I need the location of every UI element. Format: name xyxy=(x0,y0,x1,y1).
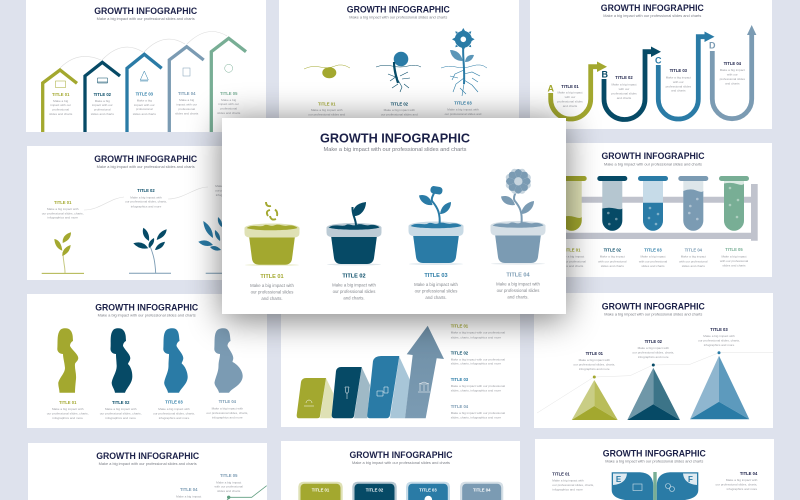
slide: U-shaped arrows: TITLE 03 xyxy=(670,68,688,73)
slide: line chart, cropped: GROWTH INFOGRAPHIC xyxy=(96,451,200,461)
slide: seed to flower: TITLE 02 xyxy=(391,102,409,106)
text: title 03: and charts. xyxy=(425,295,447,300)
pot 2: sprout xyxy=(326,202,382,266)
slide: growing plants: our professional slides, charts, xyxy=(125,200,167,204)
slide: seed to flower: TITLE 01 xyxy=(318,102,336,106)
slide: rounded cards, cropped: TITLE 04 xyxy=(473,488,491,492)
slide: test tubes: slides and charts xyxy=(682,264,705,268)
slide: seed to flower: Make a big impact with xyxy=(384,108,415,112)
slide: test tubes: TITLE 03 xyxy=(644,248,662,252)
slide: test tubes: slides and charts xyxy=(601,264,624,268)
slide: U-shaped arrows: professional slides xyxy=(720,77,745,81)
slide: test tubes: TITLE 05 xyxy=(725,247,743,252)
slide: seed to flower: our professional slides and xyxy=(445,112,482,116)
slide: U-shaped arrows: Make a big impact with our professional slides and charts xyxy=(603,14,701,18)
text: title 01: and charts. xyxy=(261,296,283,301)
text: title 01: Make a big impact with xyxy=(250,283,294,288)
slide: U-shaped arrows: D xyxy=(709,40,716,50)
slide: test tubes: with our professional xyxy=(558,259,586,263)
slide: folded growth arrow xyxy=(281,300,520,427)
slide: U-shaped arrows: TITLE 02 xyxy=(615,75,633,80)
slide: rounded cards, cropped xyxy=(281,441,520,500)
slide: growing plants: TITLE 01 xyxy=(54,200,72,205)
slide: growing plants: our professional slides, charts, xyxy=(42,211,84,215)
slide: lettered petals, cropped: TITLE 04 xyxy=(740,471,758,476)
slide: seed to flower: our professional slides and xyxy=(308,112,345,116)
slide: house arrows: impact with our xyxy=(134,103,155,107)
slide: pyramids: TITLE 02 xyxy=(645,339,663,344)
slide: folded growth arrow: slides, charts, infographics and more xyxy=(451,416,501,420)
slide: pyramids: our professional slides, charts, xyxy=(698,339,740,343)
slide: line chart, cropped xyxy=(28,443,267,500)
slide: pyramids: infographics and more xyxy=(704,343,735,347)
slide: test tubes: TITLE 02 xyxy=(604,248,622,252)
slide: house arrows: impact with our xyxy=(50,103,71,107)
slide: lettered petals, cropped: GROWTH INFOGRAPHIC xyxy=(603,448,706,458)
slide: growing plants: TITLE 02 xyxy=(137,188,155,193)
slide: house arrows: professional xyxy=(94,107,111,111)
slide: growing plants: infographics and more xyxy=(131,204,162,208)
slide: test tubes xyxy=(540,143,772,277)
slide: pyramids: TITLE 01 xyxy=(586,351,604,356)
slide: growing plants: GROWTH INFOGRAPHIC xyxy=(94,154,198,164)
text: title 02 xyxy=(332,274,376,300)
text: title 01: our professional slides xyxy=(251,289,293,294)
slide: rounded cards, cropped: TITLE 01 xyxy=(312,488,330,492)
slide: lettered petals, cropped xyxy=(535,439,774,500)
slide: folded growth arrow: slides, charts, infographics and more xyxy=(451,389,501,393)
slide: test tubes: Make a big impact xyxy=(559,255,584,259)
slide: house arrows: slides and charts xyxy=(217,111,241,115)
slide: line chart, cropped: with our professional xyxy=(215,485,243,489)
slide: test tubes: TITLE 01 xyxy=(563,248,581,252)
slide: U-shaped arrows: and charts xyxy=(563,104,578,108)
slide: test tubes: with our professional xyxy=(720,259,748,263)
text: title 02: TITLE 02 xyxy=(342,274,366,280)
slide: pregnancy silhouettes: infographics and more xyxy=(52,416,83,420)
slide: lettered petals, cropped: Make a big impact with xyxy=(552,479,584,483)
title: GROWTH INFOGRAPHIC xyxy=(320,130,471,146)
slide: U-shaped arrows: Make a big impact xyxy=(557,90,583,94)
slide: house arrows: professional xyxy=(178,107,195,111)
main slide shadow xyxy=(222,120,566,320)
text: title 03: TITLE 03 xyxy=(424,273,448,279)
slide: growing plants xyxy=(27,146,247,280)
slide: seed to flower: our professional slides and xyxy=(381,112,418,116)
pot 1: seeds xyxy=(244,202,300,266)
text: title 02: Make a big impact with xyxy=(332,282,376,287)
slide: pregnancy silhouettes: infographics and more xyxy=(105,416,136,420)
slide: house arrows: Make a big xyxy=(137,99,152,103)
slide: pregnancy silhouettes: our professional slides, charts, xyxy=(100,411,142,415)
slide: house arrows: Make a big xyxy=(53,99,69,103)
slide: lettered petals, cropped: E xyxy=(616,475,622,484)
slide: lettered petals, cropped: infographics and more xyxy=(727,487,758,491)
slide: lettered petals, cropped: Make a big impact with xyxy=(726,478,758,482)
slide: pregnancy silhouettes: Make a big impact with xyxy=(158,407,190,411)
text: title 04: and charts. xyxy=(507,295,529,300)
text: title 04: Make a big impact with xyxy=(496,282,540,287)
slide: test tubes: with our professional xyxy=(598,259,627,263)
slide: rounded cards, cropped: TITLE 03 xyxy=(419,488,437,492)
slide: house arrows: TITLE 05 xyxy=(220,91,238,96)
slide: pregnancy silhouettes: Make a big impact with xyxy=(212,406,243,410)
slide: line chart, cropped: Make a big impact xyxy=(176,494,201,498)
slide: growing plants: Make a big impact with xyxy=(130,195,162,199)
slide: U-shaped arrows: C xyxy=(655,56,662,66)
slide: test tubes: Make a big impact xyxy=(600,255,625,259)
slide: pregnancy silhouettes: TITLE 01 xyxy=(59,400,77,405)
slide: house arrows: Make a big xyxy=(221,98,237,102)
slide: house arrows: TITLE 02 xyxy=(94,92,112,97)
slide: lettered petals, cropped: Make a big impact with our professional slides and charts xyxy=(605,459,703,463)
slide: pyramids xyxy=(534,293,773,428)
slide: pregnancy silhouettes: our professional slides, charts, xyxy=(47,411,89,415)
slide: U-shaped arrows: with our xyxy=(673,80,684,84)
slide: growing plants: our professional slides, xyxy=(215,188,247,192)
slide: rounded cards, cropped: GROWTH INFOGRAPHIC xyxy=(350,450,453,460)
slide: pyramids: TITLE 03 xyxy=(710,327,728,332)
slide: U-shaped arrows: Make a big impact xyxy=(720,68,745,72)
slide: growing plants: infographics and more xyxy=(216,193,247,197)
slide: pregnancy silhouettes: TITLE 03 xyxy=(165,400,183,404)
slide: seed to flower xyxy=(279,0,519,119)
slide: house arrows: slides and charts xyxy=(175,111,199,115)
slide: pyramids: our professional slides, charts, xyxy=(573,363,615,367)
slide: U-shaped arrows: professional slides xyxy=(611,92,637,96)
slide: pregnancy silhouettes: GROWTH INFOGRAPHIC xyxy=(95,302,199,312)
slide: line chart, cropped: TITLE 04 xyxy=(180,487,198,492)
slide: pyramids: our professional slides, charts, xyxy=(632,350,674,354)
slide: test tubes: GROWTH INFOGRAPHIC xyxy=(602,151,705,161)
slide: pyramids: Make a big impact with xyxy=(579,358,610,362)
slide: pyramids: infographics and more xyxy=(579,367,610,371)
slide: U-shaped arrows: with our xyxy=(565,95,575,99)
slide: pregnancy silhouettes: Make a big impact with xyxy=(52,407,84,411)
slide: U-shaped arrows: and charts xyxy=(725,81,740,85)
slide: house arrows: professional xyxy=(220,106,237,110)
slide: house arrows: Make a big xyxy=(179,98,195,102)
slide: seed to flower: Make a big impact with xyxy=(311,108,343,112)
text: title 03: Make a big impact with xyxy=(414,282,458,287)
slide: U-shaped arrows xyxy=(530,0,772,129)
text: title 02: and charts. xyxy=(343,295,365,300)
slide: folded growth arrow: Make a big impact with our professional xyxy=(451,384,505,388)
slide: U-shaped arrows: and charts xyxy=(617,96,632,100)
slide: test tubes: slides and charts xyxy=(560,264,584,268)
slide: lettered petals, cropped: our professional slides, charts, xyxy=(552,483,594,487)
slide: pregnancy silhouettes: TITLE 02 xyxy=(112,400,130,405)
slide: test tubes: with our professional xyxy=(639,259,667,263)
slide: house arrows: professional xyxy=(136,107,153,111)
slide: U-shaped arrows: professional slides xyxy=(557,100,583,104)
text: title 03 xyxy=(414,273,458,300)
slide: line chart, cropped: slides and charts xyxy=(217,489,241,493)
slide: U-shaped arrows: and charts xyxy=(671,89,686,93)
slide: house arrows: Make a big xyxy=(95,99,110,103)
subtitle: Make a big impact with our professional slides and charts xyxy=(324,147,467,153)
slide: folded growth arrow: TITLE 02 xyxy=(451,350,469,356)
slide: pyramids: infographics and more xyxy=(638,355,669,359)
slide: growing plants: Make a big impact with xyxy=(47,207,79,211)
slide: pregnancy silhouettes: our professional slides, charts, xyxy=(206,411,248,415)
slide: folded growth arrow: TITLE 03 xyxy=(451,377,469,382)
panel: main growth infographic xyxy=(222,118,566,314)
slide: line chart, cropped: Make a big impact xyxy=(216,480,241,484)
slide: U-shaped arrows: GROWTH INFOGRAPHIC xyxy=(601,3,704,13)
slide: test tubes: slides and charts xyxy=(722,264,746,268)
text: title 01: TITLE 01 xyxy=(260,274,284,280)
slide: U-shaped arrows: A xyxy=(547,84,554,94)
slide: line chart, cropped: Make a big impact with our professional slides and charts xyxy=(99,462,197,466)
slide: house arrows: TITLE 04 xyxy=(178,91,196,96)
slide: pregnancy silhouettes xyxy=(27,294,267,428)
slide: U-shaped arrows: Make a big impact xyxy=(666,75,691,79)
slide: seed to flower: GROWTH INFOGRAPHIC xyxy=(347,4,450,14)
slide: seed to flower: TITLE 03 xyxy=(454,100,472,106)
slide: folded growth arrow: Make a big impact with our professional xyxy=(451,331,505,335)
text: title 04 xyxy=(496,273,540,300)
slide: U-shaped arrows: with our xyxy=(619,87,629,91)
text: title 02: our professional slides xyxy=(333,289,375,294)
slide: U-shaped arrows: TITLE 01 xyxy=(561,84,579,89)
slide: pregnancy silhouettes: our professional slides, charts, xyxy=(153,411,195,415)
slide: test tubes: with our professional xyxy=(679,259,708,263)
slide: pyramids: Make a big impact with our professional slides and charts xyxy=(604,312,702,316)
slide: pyramids: Make a big impact with xyxy=(703,334,735,338)
slide: test tubes: Make a big impact xyxy=(721,254,747,258)
text: title 04: our professional slides xyxy=(497,288,539,293)
slide: test tubes: TITLE 04 xyxy=(685,248,703,252)
pot 3: young plant xyxy=(408,186,464,265)
slide: test tubes: Make a big impact xyxy=(681,255,706,259)
pot 4: flower xyxy=(490,167,546,265)
slide: U-shaped arrows: B xyxy=(601,70,608,80)
slide: lettered petals, cropped: our professional slides, charts, xyxy=(716,482,757,486)
slide: growing plants: Make a big impact with our professional slides and charts xyxy=(97,165,195,169)
text: title 01 xyxy=(250,274,294,301)
slide: pyramids: Make a big impact with xyxy=(638,346,669,350)
slide: line chart, cropped: TITLE 05 xyxy=(220,473,238,478)
slide: lettered petals, cropped: F xyxy=(688,475,693,484)
slide: house arrows: TITLE 03 xyxy=(136,92,154,97)
slide: test tubes: slides and charts xyxy=(641,264,665,268)
slide: pregnancy silhouettes: infographics and more xyxy=(159,416,190,420)
slide: house arrows: Make a big impact with our professional slides and charts xyxy=(97,17,195,21)
slide: seed to flower: Make a big impact with xyxy=(447,108,479,112)
slide: lettered petals, cropped: infographics and more xyxy=(552,487,583,491)
slide: house arrows: slides and charts xyxy=(49,112,73,116)
slide: pregnancy silhouettes: Make a big impact with our professional slides and charts xyxy=(98,313,196,317)
slide: lettered petals, cropped: TITLE 01 xyxy=(552,472,570,476)
slide: house arrows: impact with our xyxy=(176,102,197,106)
slide: pregnancy silhouettes: infographics and more xyxy=(212,415,243,419)
slide: folded growth arrow: slides, charts, infographics and more xyxy=(451,362,501,366)
text: title 03: our professional slides xyxy=(415,288,457,294)
slide: house arrows xyxy=(26,0,266,132)
slide: folded growth arrow: slides, charts, infographics and more xyxy=(451,335,501,339)
slide: test tubes: Make a big impact with our professional slides and charts xyxy=(604,162,702,166)
slide: house arrows: slides and charts xyxy=(91,112,114,116)
slide: pyramids: GROWTH INFOGRAPHIC xyxy=(602,301,705,311)
slide: folded growth arrow: Make a big impact with our professional xyxy=(451,411,505,415)
slide: house arrows: impact with our xyxy=(218,102,239,106)
slide: growing plants: infographics and more xyxy=(47,216,78,220)
slide: seed to flower: Make a big impact with our professional slides and charts xyxy=(349,16,447,20)
slide: folded growth arrow: TITLE 01 xyxy=(451,324,469,328)
slide: folded growth arrow: TITLE 04 xyxy=(451,404,469,409)
slide: house arrows: impact with our xyxy=(92,103,113,107)
text: title 04: TITLE 04 xyxy=(506,273,531,279)
slide: test tubes: Make a big impact xyxy=(640,255,666,259)
slide: house arrows: slides and charts xyxy=(133,112,156,116)
slide: U-shaped arrows: professional slides xyxy=(666,84,691,88)
slide: rounded cards, cropped: Make a big impact with our professional slides and charts xyxy=(352,461,450,465)
slide: rounded cards, cropped: TITLE 02 xyxy=(366,488,384,492)
slide: house arrows: professional xyxy=(52,107,69,111)
slide: pregnancy silhouettes: Make a big impact with xyxy=(105,407,137,411)
slide: house arrows: GROWTH INFOGRAPHIC xyxy=(94,6,198,16)
slide: growing plants: Make a big impact with xyxy=(215,184,247,188)
slide: U-shaped arrows: Make a big impact xyxy=(611,82,637,86)
slide: house arrows: TITLE 01 xyxy=(52,92,70,97)
slide: folded growth arrow: Make a big impact with our professional xyxy=(451,357,505,361)
slide: U-shaped arrows: TITLE 04 xyxy=(724,61,742,66)
slide: pregnancy silhouettes: TITLE 04 xyxy=(219,399,237,404)
slide: U-shaped arrows: with our xyxy=(727,72,738,76)
